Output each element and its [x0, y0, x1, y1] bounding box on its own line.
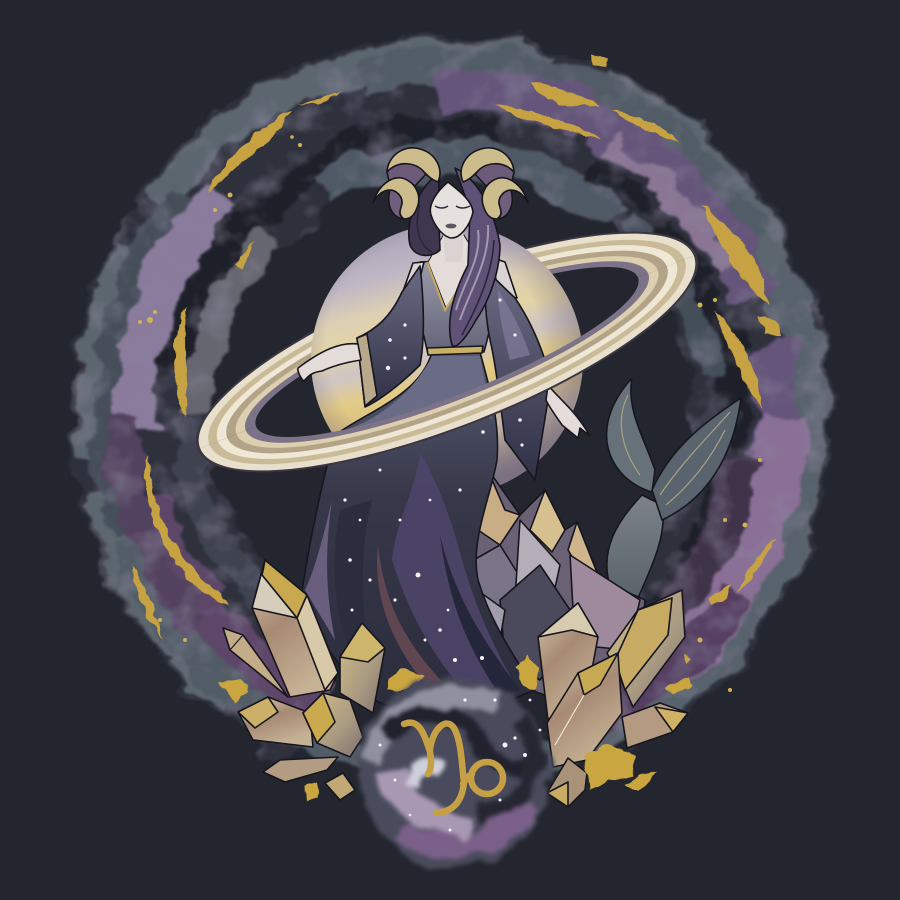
right fin — [652, 398, 741, 520]
face — [430, 182, 473, 238]
right horn lower curl — [482, 178, 528, 219]
crystal: low horizontal — [238, 697, 313, 747]
left fin — [607, 378, 655, 492]
crystal: tiny — [325, 773, 355, 800]
crystal: front gold facet — [578, 653, 618, 695]
neckline gold trim — [427, 262, 478, 310]
orb swirl — [372, 696, 532, 847]
left hand — [298, 344, 361, 381]
gold foil fragments — [218, 655, 692, 802]
right horn — [461, 148, 528, 219]
capricorn symbol — [404, 723, 503, 813]
flowing skirt — [302, 352, 535, 720]
crystal: large — [252, 560, 338, 697]
crystal: large top facet — [252, 560, 297, 618]
swirl: pale core — [415, 766, 440, 790]
neckline skin — [428, 232, 478, 308]
teal gray inner band — [80, 43, 824, 787]
crystal: middle — [340, 623, 385, 713]
crystal: low gold facet — [238, 697, 278, 728]
crystal: big right — [607, 590, 685, 707]
left horn lower curl — [373, 178, 419, 219]
right horn lower purple — [497, 190, 512, 219]
left horn — [373, 148, 440, 219]
woman — [298, 148, 590, 720]
galaxy orb — [358, 677, 548, 867]
right crystal cluster — [538, 590, 688, 807]
swirl: purple — [400, 800, 530, 847]
right sleeve highlight — [498, 290, 530, 360]
left sleeve cuff — [357, 334, 377, 406]
right horn upper arc — [461, 148, 514, 182]
crystal: small left — [223, 628, 288, 697]
crystal: horizontal — [622, 703, 688, 748]
fin ribs — [621, 395, 730, 505]
skirt dark trail — [440, 535, 520, 695]
crystal: large gold facet — [262, 560, 307, 618]
waist belt — [427, 346, 483, 355]
lower bodice drape — [340, 356, 492, 432]
hair dark strands — [417, 205, 494, 335]
right shoulder skin — [493, 258, 517, 298]
skirt left folds — [335, 500, 372, 660]
saturn ring: back half — [196, 232, 696, 449]
crystal: faceted front — [303, 693, 363, 757]
dark navy band — [125, 88, 779, 742]
crystal: tall top facet — [538, 603, 598, 637]
crystal: front pale edge — [555, 695, 584, 745]
left sleeve — [357, 266, 423, 407]
right sleeve — [485, 270, 548, 480]
crystal: horizontal gold facet — [655, 707, 688, 732]
left crystal cluster — [223, 560, 385, 800]
swirl: lavender center — [392, 770, 470, 830]
gold leaf streaks on ring — [132, 55, 780, 640]
tail body — [607, 495, 663, 598]
swirl: gray outer — [372, 696, 500, 760]
crystal: front — [547, 653, 622, 767]
saturn ring: front half — [198, 255, 698, 472]
dress stars — [343, 298, 524, 662]
swirl: dark right — [480, 720, 532, 815]
torso bodice — [417, 258, 496, 354]
crystal: middle top facet — [340, 623, 385, 662]
crystal: lower shard — [263, 757, 338, 782]
crystal: faceted gold facet — [303, 693, 335, 743]
mountains — [440, 468, 645, 700]
left horn lower purple — [389, 190, 404, 219]
right hand — [546, 385, 590, 438]
crystal: small hex gold facet — [547, 782, 568, 807]
hair light strands — [456, 225, 488, 320]
hair back — [409, 172, 440, 255]
left horn upper arc — [387, 148, 440, 182]
crystal: small left edges — [230, 635, 243, 650]
swirl: dark — [385, 714, 530, 768]
left shoulder skin — [402, 262, 424, 298]
left horn purple inner — [387, 163, 426, 186]
planet — [293, 206, 601, 514]
crystal: large side facet — [297, 595, 338, 690]
ring speckle stars — [138, 135, 762, 692]
right horn purple inner — [475, 163, 514, 186]
crystal: small hex — [547, 758, 587, 807]
lips — [446, 224, 456, 228]
orb stars — [378, 698, 541, 832]
skirt purple fold — [392, 452, 518, 700]
crystal: big right gold facet — [615, 598, 672, 690]
eyes — [435, 206, 470, 208]
mermaid tail — [607, 378, 741, 598]
orb base — [358, 677, 548, 867]
skirt brown stripe — [377, 545, 455, 695]
crystal: tall — [538, 603, 598, 720]
neck — [442, 228, 464, 262]
